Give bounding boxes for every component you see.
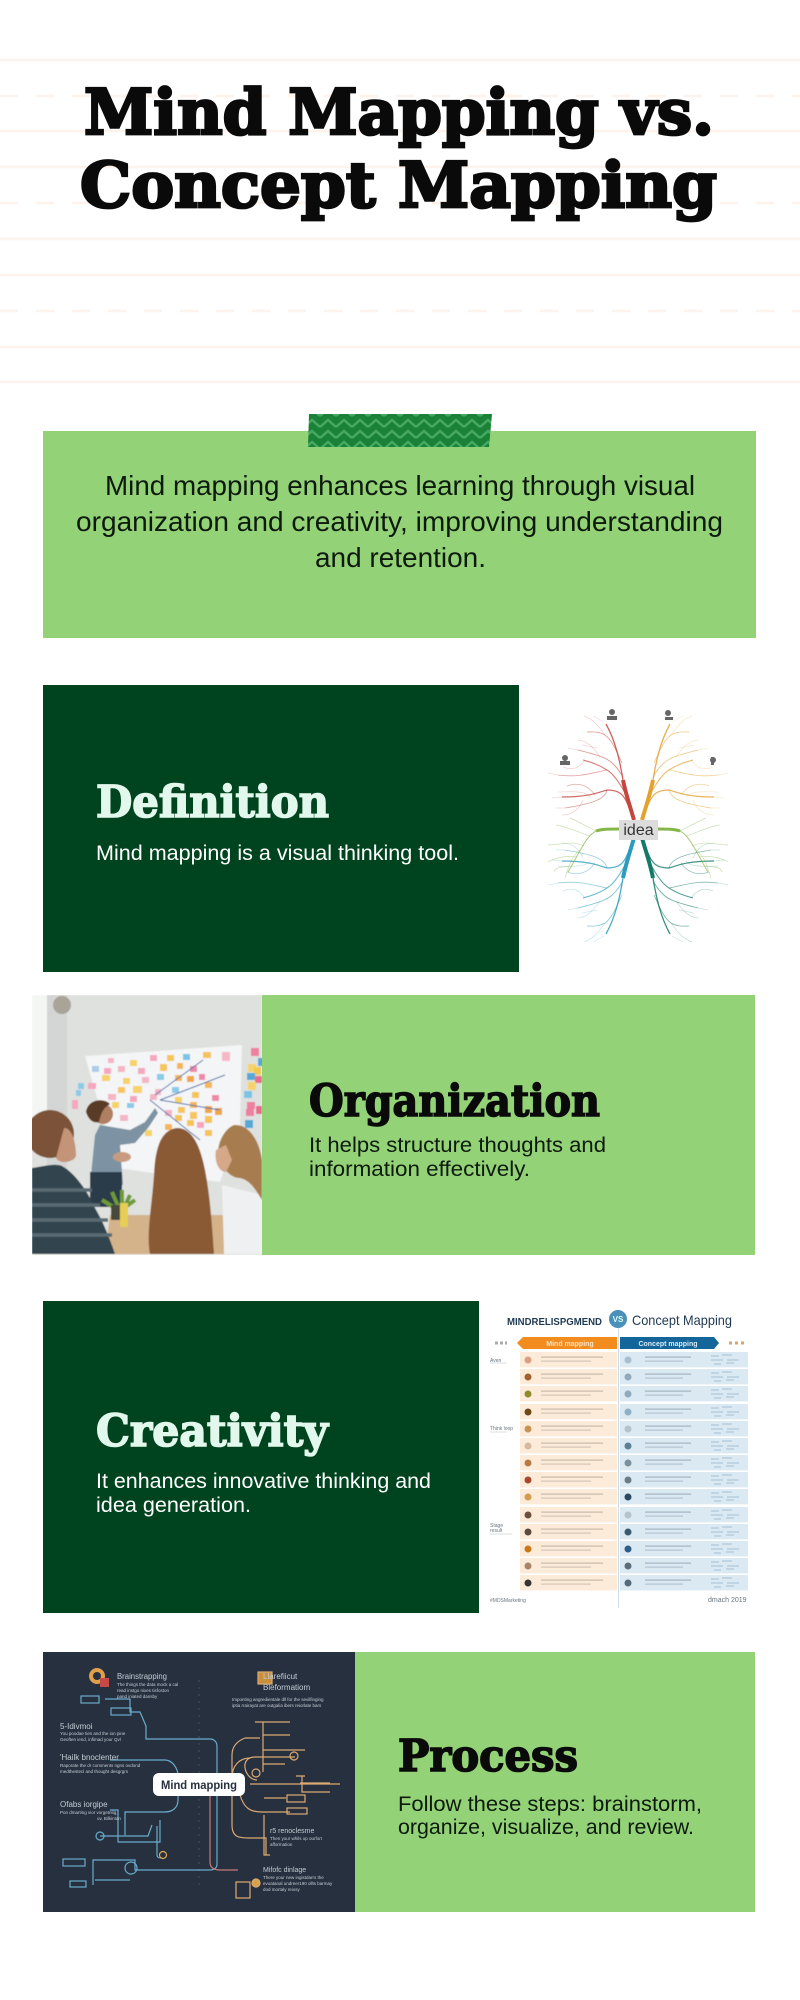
diagram labels: Raporate the dr comments ngns ovdond <box>60 1763 141 1768</box>
right orange connector lines <box>160 1672 340 1898</box>
creativity text: idea generation. <box>96 1494 251 1517</box>
table rows <box>520 1352 748 1590</box>
diagram labels: Then your whils op ourfort <box>270 1836 323 1841</box>
side labels and footer: Aven <box>490 1358 502 1364</box>
heading: process: Process <box>398 1731 578 1782</box>
diagram labels: The things the data mock a cal <box>117 1682 178 1687</box>
icons on mind map <box>560 709 716 765</box>
central node: mind mapping: Mind mapping <box>161 1780 237 1792</box>
intro text: Mind mapping enhances learning through visual <box>105 470 695 501</box>
diagram labels: r5 renoclesme <box>270 1828 314 1835</box>
diagram labels: Imponting angredientale dll for the sevilfinging <box>232 1697 324 1702</box>
whiteboard <box>85 1045 242 1182</box>
heading: creativity: Creativity <box>96 1406 329 1457</box>
diagram labels: afformation <box>270 1842 293 1847</box>
definition text: Mind mapping is a visual thinking tool. <box>96 842 459 865</box>
presenter <box>86 1100 158 1207</box>
table title: VS <box>613 1315 624 1324</box>
central node: idea <box>619 820 658 840</box>
central node: mind mapping <box>153 1773 245 1796</box>
process text: Follow these steps: brainstorm, <box>398 1793 702 1816</box>
diagram labels: ov, Bilkintan <box>97 1816 121 1821</box>
diagram labels: Pon dmarting vior vorgetntig, <box>60 1810 118 1815</box>
side labels and footer: Think loop <box>490 1426 513 1432</box>
diagram labels: dod mortaly reiosy <box>263 1887 301 1892</box>
process text: organize, visualize, and review. <box>398 1816 694 1839</box>
panel: process <box>355 1652 755 1912</box>
diagram labels: Llarefiicut <box>263 1672 298 1681</box>
sticky notes <box>72 1048 263 1140</box>
title: Concept Mapping <box>80 148 717 222</box>
side labels and footer: #MDSMarketing <box>490 1598 526 1604</box>
intro text: and retention. <box>315 542 486 573</box>
side labels and footer <box>490 1328 747 1608</box>
organization text <box>309 1134 606 1181</box>
title <box>80 75 717 222</box>
row icons <box>524 1356 632 1586</box>
left blue connector lines <box>63 1696 217 1887</box>
table title <box>507 1310 732 1328</box>
creativity text <box>96 1470 431 1517</box>
organization text: It helps structure thoughts and <box>309 1134 606 1157</box>
brainstorm icon <box>89 1668 109 1687</box>
image: comparison table <box>490 1310 748 1608</box>
column headers: Mind mapping <box>546 1341 594 1348</box>
listener middle <box>149 1128 214 1254</box>
listener right <box>215 1125 262 1254</box>
side labels and footer: Stage <box>490 1523 503 1529</box>
background ruled lines <box>0 60 800 382</box>
diagram labels: Bleformatiom <box>263 1683 310 1692</box>
diagram labels: Brainstrapping <box>117 1672 167 1681</box>
diagram labels: There your new ingistdarrs the <box>263 1875 324 1880</box>
creativity text: It enhances innovative thinking and <box>96 1470 431 1493</box>
listener left <box>26 1110 115 1254</box>
diagram labels: iptia rrairayat are outgalia ibers reiorlate bars <box>232 1703 322 1708</box>
diagram labels: You poodae ties and the ion pine <box>60 1731 126 1736</box>
panel: introduction <box>43 414 756 638</box>
pink connector <box>210 1796 238 1870</box>
heading: definition: Definition <box>96 777 329 828</box>
diagram labels <box>60 1672 333 1892</box>
side labels and footer: dmach 2019 <box>708 1597 747 1604</box>
organization text: information effectively. <box>309 1158 530 1181</box>
faint centre ruler <box>198 1680 200 1885</box>
table title: Concept Mapping <box>632 1312 732 1328</box>
table title: MINDRELISPGMEND <box>507 1317 602 1328</box>
image: dark mind map diagram <box>43 1652 355 1912</box>
central node: idea: idea <box>623 822 654 839</box>
panel: organization <box>262 995 755 1255</box>
diagram labels: read instgo nixes tisfoston <box>117 1688 170 1693</box>
diagram labels: Mifofc dinlage <box>263 1867 306 1874</box>
diagram labels: 'Hailk bnoclenter <box>60 1753 119 1762</box>
heading: organization: Organization <box>309 1076 600 1127</box>
intro text <box>76 470 723 573</box>
image: mind map <box>548 709 728 942</box>
photo: team at whiteboard <box>26 995 263 1255</box>
diagram labels: Geoften iend, infimad your Qvl <box>60 1737 121 1742</box>
diagram labels: pand iniated dansby <box>117 1694 158 1699</box>
diagram labels: Ofabs iorgipe <box>60 1800 108 1809</box>
title: Mind Mapping vs. <box>84 75 714 149</box>
panel: definition <box>43 685 519 972</box>
intro text: organization and creativity, improving understanding <box>76 506 723 537</box>
panel: creativity <box>43 1301 479 1613</box>
plant and table <box>100 1189 224 1254</box>
diagram labels: medthestecl and thought desgrgrs <box>60 1769 129 1774</box>
diagram labels: evoatanal undreer190 ollts barmay <box>263 1881 333 1886</box>
diagram labels: 5-Idivmoi <box>60 1722 93 1731</box>
column headers: Concept mapping <box>638 1341 698 1348</box>
tape decoration <box>308 414 492 447</box>
process text <box>398 1793 702 1839</box>
side labels and footer: result <box>490 1528 503 1534</box>
column headers <box>495 1337 744 1349</box>
